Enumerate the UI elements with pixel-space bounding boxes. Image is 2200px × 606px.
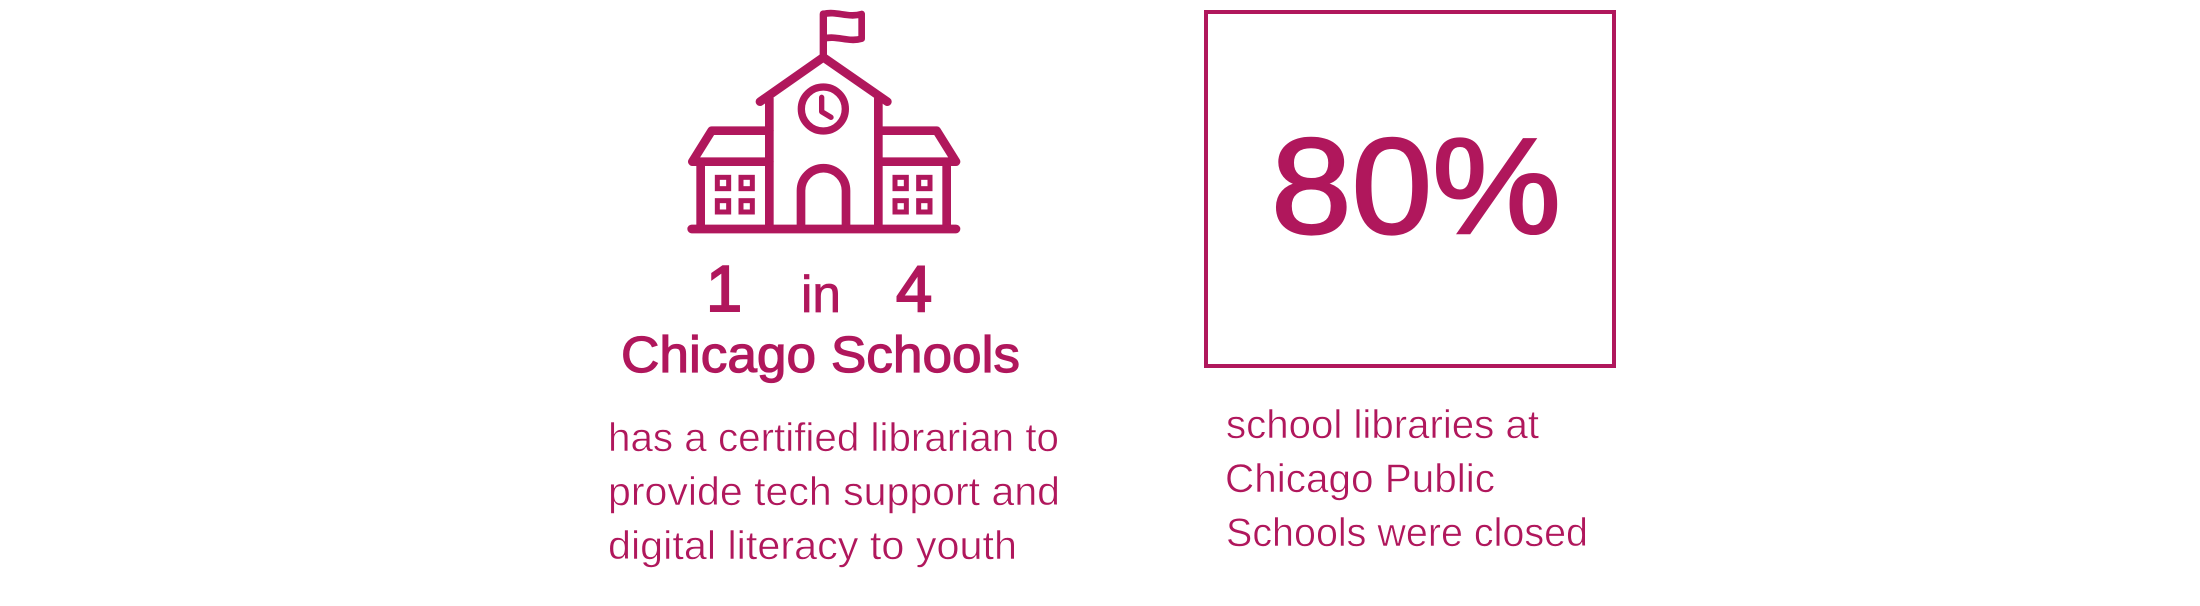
stat box: outlined square [1206,12,1614,366]
text block: certified librarian description: provide tech support and [608,470,1060,514]
icon: school building [692,13,956,229]
heading: 1 in 4: 1 [706,252,742,325]
text block: certified librarian description [608,416,1060,568]
text block: closed libraries description: Schools were closed [1226,511,1588,555]
heading: 1 in 4 [706,252,932,325]
text block: closed libraries description: school libraries at [1226,403,1539,447]
heading: 1 in 4: 4 [896,252,932,325]
big number: 80%: 80% [1271,110,1561,262]
panel: 80 percent closed [1206,12,1614,555]
text block: closed libraries description: Chicago Public [1225,457,1495,501]
text block: certified librarian description: has a certified librarian to [608,416,1059,460]
text block: certified librarian description: digital literacy to youth [608,524,1017,568]
heading: 1 in 4: in [801,266,841,324]
text block: closed libraries description [1225,403,1588,555]
heading: Chicago Schools: Chicago Schools [621,326,1020,383]
panel: 1 in 4 Chicago schools [608,13,1060,568]
